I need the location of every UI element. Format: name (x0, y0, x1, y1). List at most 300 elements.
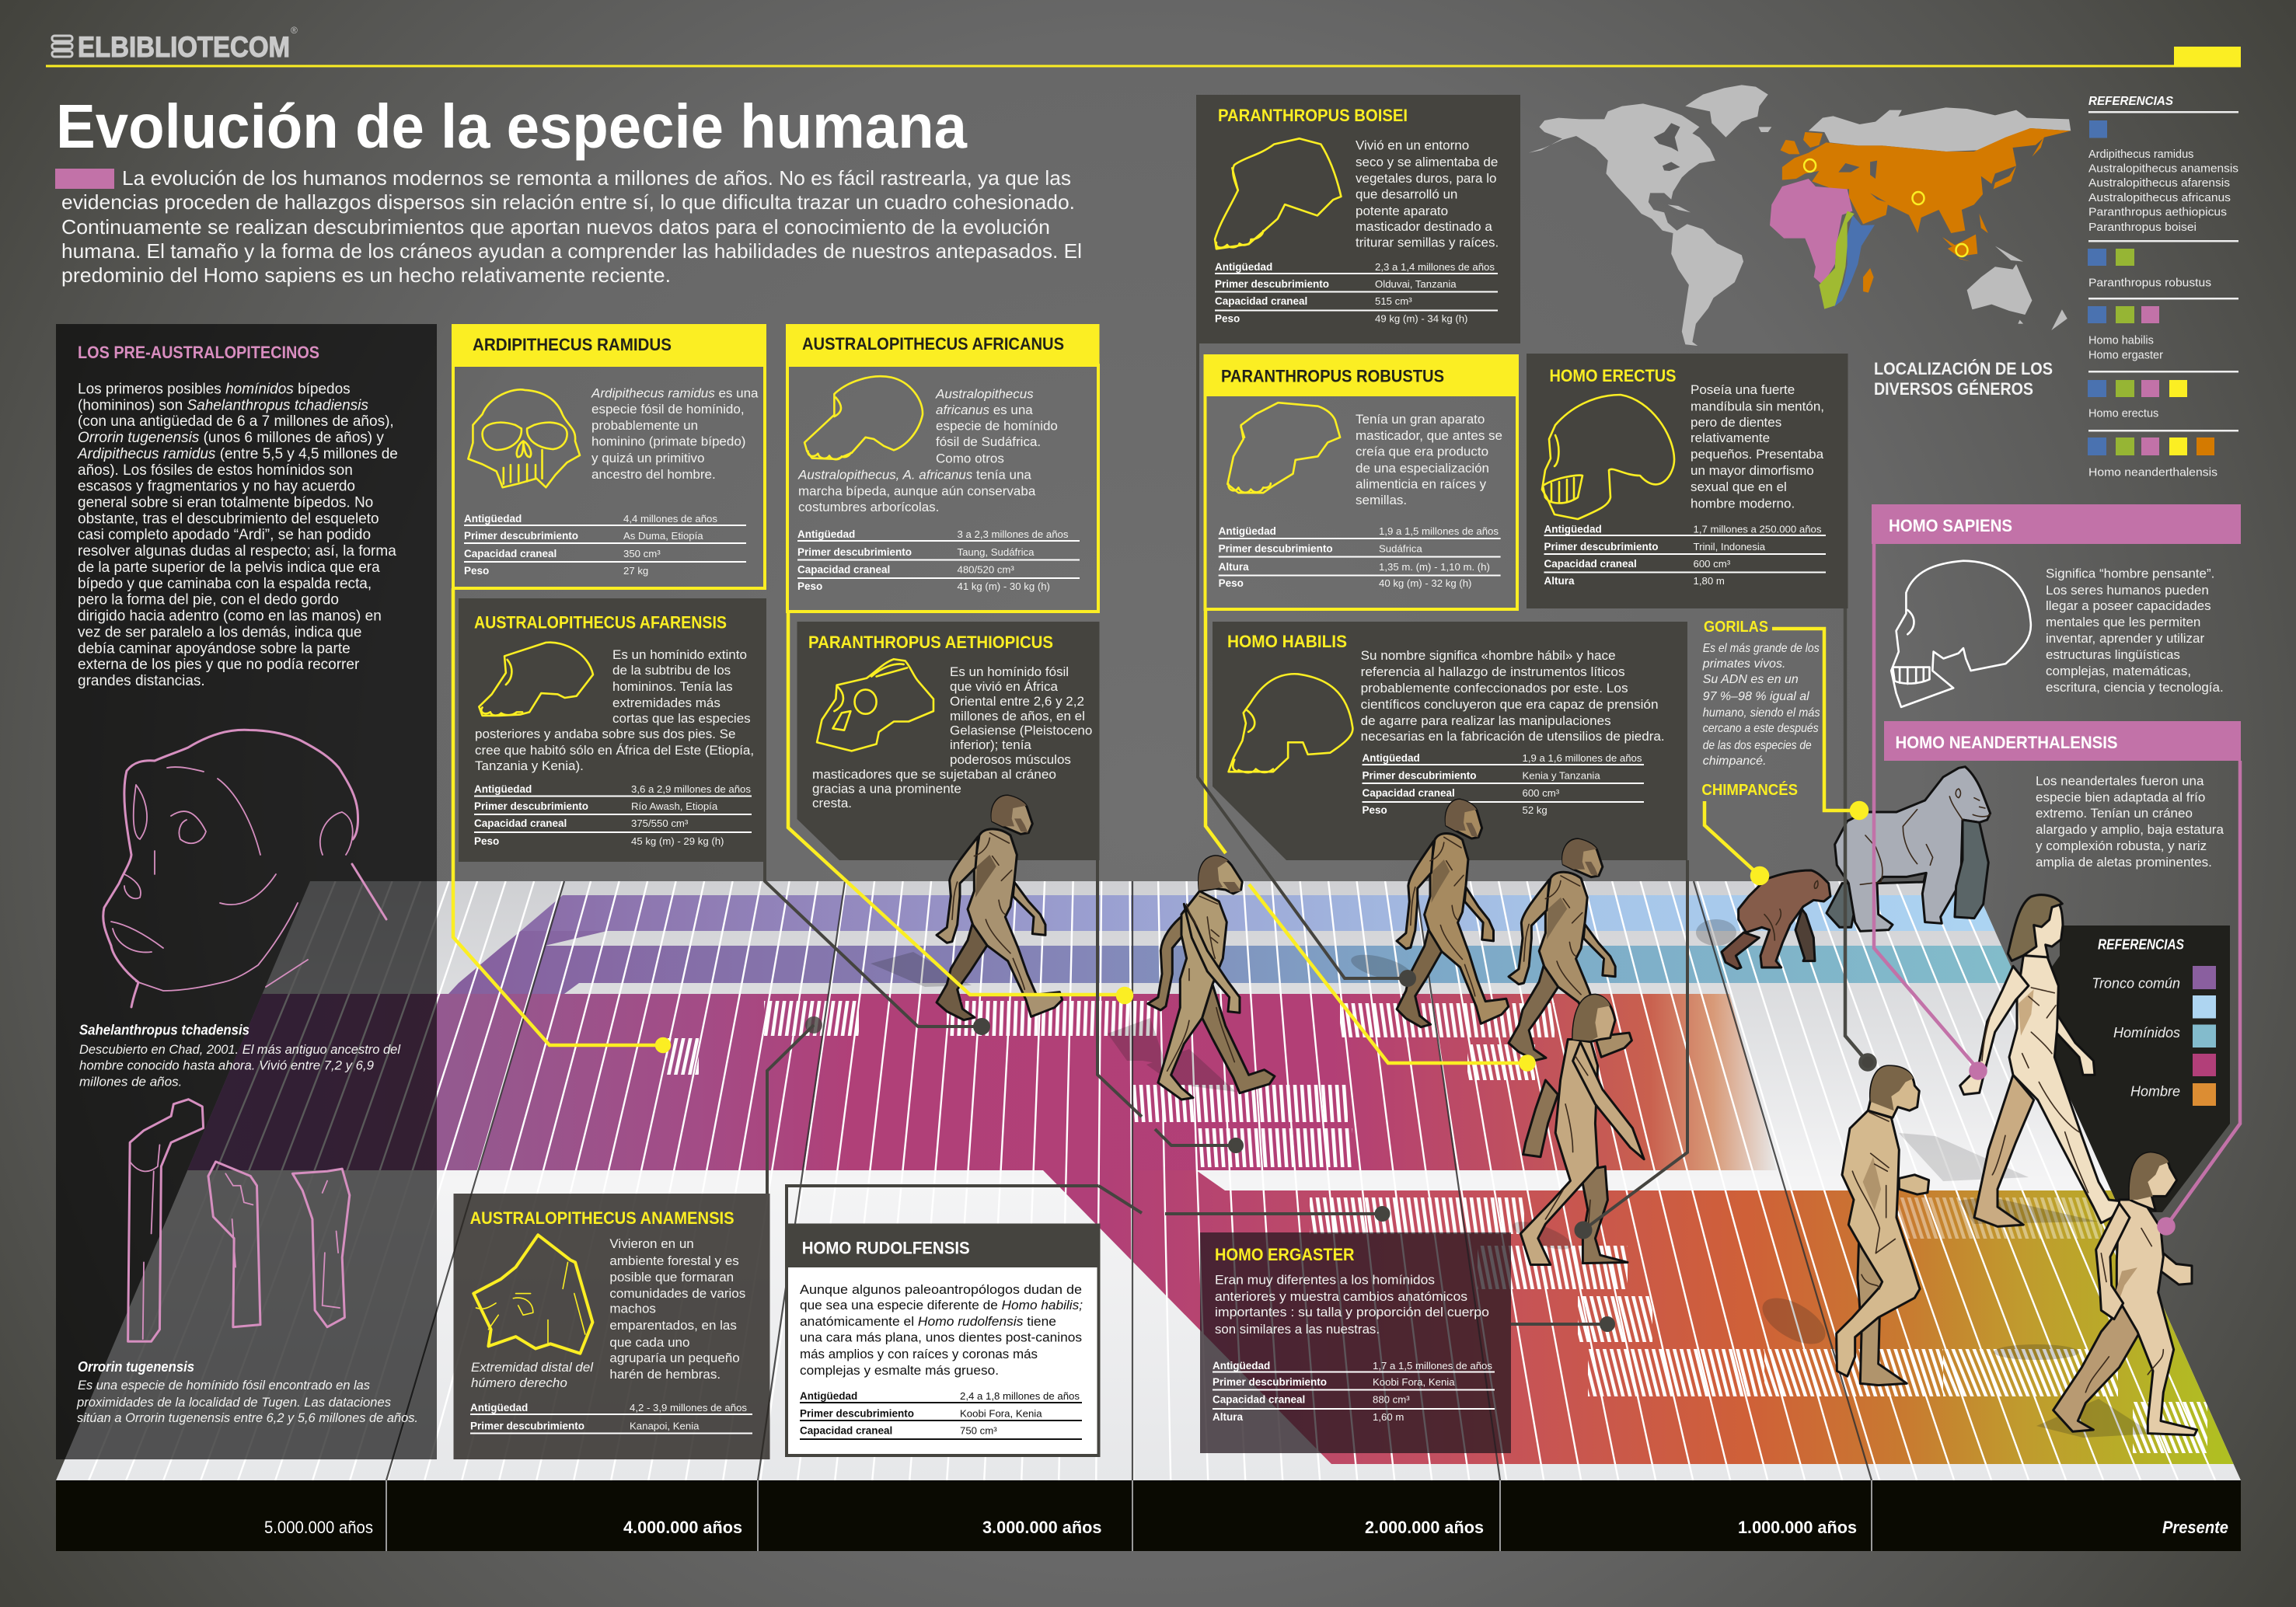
panel: paranthropus boisei: Vivió en un entorno (1356, 138, 1469, 153)
panel: paranthropus robustus: 1,9 a 1,5 millones de años (1379, 525, 1499, 537)
text: pre-australopitecinos description: Ardipithecus ramidus (entre 5,5 y 4,5 millones de (77, 446, 398, 462)
icon: afarensis skull (479, 643, 593, 716)
map legend: Paranthropus robustus (2088, 277, 2211, 290)
panel: homo ergaster (1200, 1232, 1511, 1453)
text: sahelanthropus tchadensis: millones de años. (79, 1074, 182, 1089)
panel: homo erectus: pero de dientes (1691, 415, 1781, 430)
panel: paranthropus robustus: 40 kg (m) - 32 kg (h) (1379, 577, 1471, 589)
panel: homo habilis: HOMO HABILIS (1227, 632, 1347, 651)
panel: paranthropus boisei: 515 cm³ (1375, 295, 1412, 307)
panel: ardipithecus ramidus: 4,4 millones de años (623, 513, 717, 525)
text: orrorin tugenensis: Orrorin tugenensis (78, 1359, 194, 1375)
icon: robustus skull (1227, 403, 1340, 493)
map: localization of genera (1529, 85, 2071, 346)
text: pre-australopitecinos description: (homininos) son Sahelanthropus tchadiensis (78, 397, 368, 413)
panel: paranthropus robustus: creía que era producto (1356, 444, 1488, 459)
panel: australopithecus afarensis: Capacidad craneal (474, 817, 567, 829)
icon: habilis skull (1229, 674, 1352, 772)
panel: australopithecus africanus: costumbres arborícolas. (798, 500, 939, 514)
panel: australopithecus africanus: 3 a 2,3 millones de años (958, 528, 1069, 540)
panel: australopithecus afarensis: 45 kg (m) - 29 kg (h) (631, 835, 724, 847)
panel: homo rudolfensis: más amplios y con raíces y coronas más (800, 1347, 1038, 1361)
text: pre-australopitecinos description: general sobre si eran totalmente bípedos. No (78, 494, 373, 511)
panel: homo erectus (1527, 354, 1848, 608)
time scale bar (56, 1480, 2241, 1551)
text: pre-australopitecinos description: grandes distancias. (78, 673, 205, 689)
panel: homo sapiens: Significa “hombre pensante”. (2046, 566, 2214, 581)
panel: homo erectus: 1,7 millones a 250.000 años (1693, 524, 1822, 535)
text: orrorin tugenensis: proximidades de la localidad de Tugen. Las dataciones (76, 1395, 391, 1410)
panel: australopithecus anamensis: ambiente forestal y es (609, 1253, 739, 1268)
panel: paranthropus boisei: Olduvai, Tanzania (1375, 278, 1457, 290)
panel: homo ergaster: Altura (1213, 1411, 1243, 1423)
header rule with yellow tab (46, 47, 2241, 67)
panel: paranthropus robustus: Altura (1219, 561, 1249, 573)
leader: afarensis (765, 862, 989, 1034)
panel: australopithecus afarensis: 375/550 cm³ (631, 817, 689, 829)
panel: australopithecus africanus: especie de homínido (936, 419, 1058, 434)
figure: homo neanderthalensis walker (2053, 1152, 2197, 1435)
panel: paranthropus robustus: 1,35 m. (m) - 1,10 m. (h) (1379, 561, 1490, 573)
map legend: Homo ergaster (2088, 350, 2163, 362)
panel: ardipithecus ramidus: Peso (464, 565, 489, 577)
panel: homo erectus: un mayor dimorfismo (1691, 463, 1814, 478)
intro text: Continuamente se realizan descubrimientos que aportan nuevos datos para el conocimiento de la evolución (61, 217, 1050, 239)
panel: homo erectus: 1,80 m (1693, 575, 1725, 587)
panel: paranthropus aethiopicus: que vivió en África (950, 679, 1058, 694)
panel: homo rudolfensis: Aunque algunos paleoantropólogos dudan de (800, 1282, 1082, 1297)
illustration: gorilla (1827, 767, 1991, 931)
panel: los pre-australopitecinos: LOS PRE-AUSTRALOPITECINOS (78, 343, 319, 362)
panel: paranthropus aethiopicus: Gelasiense (Pleistoceno (950, 723, 1092, 738)
panel: homo erectus: HOMO ERECTUS (1550, 366, 1676, 385)
leader: chimpancés (1705, 801, 1767, 884)
logo: elbibliotecom: ® (291, 25, 298, 36)
panel: homo habilis: Capacidad craneal (1362, 787, 1455, 799)
panel: paranthropus robustus: de una especialización (1356, 461, 1489, 476)
icon: aethiopicus skull (817, 659, 933, 751)
panel: homo erectus: Poseía una fuerte (1691, 382, 1795, 397)
panel: gorilas and chimpancés: humano, siendo el más (1703, 706, 1820, 720)
panel: paranthropus aethiopicus: poderosos músculos (950, 752, 1071, 767)
panel: australopithecus anamensis: 4,2 - 3,9 millones de años (630, 1402, 747, 1414)
panel: homo neanderthalensis: Los neandertales fueron una (2036, 774, 2204, 789)
title: Evolución de la especie humana (56, 92, 967, 161)
logo: elbibliotecom: ELBIBLIOTECOM (78, 31, 290, 63)
panel: homo sapiens: HOMO SAPIENS (1889, 516, 2012, 535)
panel: australopithecus africanus: Antigüedad (797, 528, 855, 540)
time lines on floor (386, 881, 1872, 1480)
panel: homo ergaster: Antigüedad (1213, 1360, 1270, 1372)
panel: homo neanderthalensis: especie bien adaptada al frío (2036, 790, 2205, 805)
panel: australopithecus anamensis: Antigüedad (470, 1402, 528, 1414)
figure: hominid walker habilis (1397, 800, 1509, 1027)
panel: homo neanderthalensis: y complexión robusta, y nariz (2036, 838, 2207, 853)
panel: homo habilis: científicos concluyeron que era capaz de prensión (1361, 697, 1659, 712)
panel: australopithecus afarensis: de la subtribu de los (612, 663, 731, 678)
panel: homo sapiens: complejas, matemáticas, (2046, 664, 2191, 678)
panel: homo habilis (1213, 622, 1687, 860)
panel: homo ergaster: HOMO ERGASTER (1215, 1245, 1355, 1264)
map legend: Homo neanderthalensis (2088, 467, 2217, 479)
panel: timeline references (2021, 926, 2230, 1212)
intro text: evidencias proceden de hallazgos dispersos sin relación entre sí, lo que dificulta trazar un cuadro cohesionado. (61, 192, 1075, 214)
panel: australopithecus anamensis: comunidades de varios (609, 1286, 745, 1301)
panel: ardipithecus ramidus: 27 kg (623, 565, 648, 577)
panel: paranthropus aethiopicus: gracias a una prominente (812, 782, 961, 796)
timeline floor (56, 881, 2241, 1480)
panel: ardipithecus ramidus: hominino (primate bípedo) (591, 434, 745, 449)
panel: australopithecus anamensis (454, 1194, 769, 1459)
map legend: REFERENCIAS (2088, 95, 2173, 108)
intro text (55, 168, 1082, 287)
text: pre-australopitecinos description: Los primeros posibles homínidos bípedos (78, 381, 351, 398)
panel: homo rudolfensis: 2,4 a 1,8 millones de años (960, 1390, 1080, 1402)
panel: paranthropus robustus: semillas. (1356, 493, 1407, 507)
panel: australopithecus afarensis: Antigüedad (474, 783, 532, 795)
text: orrorin tugenensis (76, 1359, 418, 1425)
panel: homo neanderthalensis: extremo. Tenían un cráneo (2036, 806, 2193, 821)
icon: erectus skull (1542, 395, 1674, 519)
panel: homo habilis: referencia al hallazgo de instrumentos líticos (1361, 664, 1625, 679)
leader: homo erectus (1845, 608, 1875, 1069)
panel: australopithecus anamensis: emparentados, en las (609, 1318, 737, 1333)
panel: australopithecus africanus: Taung, Sudáfrica (958, 546, 1035, 558)
panel: gorilas and chimpancés: 97 %–98 % igual al (1703, 690, 1809, 703)
text: pre-australopitecinos description: Orrorin tugenensis (unos 6 millones de años) y (78, 430, 384, 446)
panel: australopithecus africanus: Peso (797, 580, 822, 592)
panel: paranthropus robustus: PARANTHROPUS ROBUSTUS (1221, 367, 1444, 385)
panel: paranthropus robustus: Peso (1219, 577, 1244, 589)
leader: africanus yellow (788, 612, 1132, 1002)
panel: paranthropus robustus: Sudáfrica (1379, 543, 1422, 555)
icon: ardipithecus skull (468, 389, 580, 487)
panel: homo erectus: Capacidad craneal (1544, 558, 1637, 570)
panel: paranthropus boisei: 49 kg (m) - 34 kg (h) (1375, 313, 1467, 325)
text: sahelanthropus tchadensis: hombre conocido hasta ahora. Vivió entre 7,2 y 6,9 (79, 1058, 375, 1072)
panel: paranthropus robustus: masticador, que antes se (1356, 428, 1502, 443)
panel: gorilas and chimpancés (1701, 619, 1820, 799)
panel: homo rudolfensis: 750 cm³ (960, 1425, 997, 1437)
text: pre-australopitecinos description (77, 381, 398, 689)
icon: sapiens skull (1891, 561, 2031, 707)
panel: australopithecus africanus: fósil de Sudáfrica. (936, 434, 1041, 449)
map title (1874, 359, 2053, 399)
leader: aethiopicus (1097, 860, 1242, 1152)
panel: paranthropus robustus (1203, 354, 1519, 609)
panel: homo rudolfensis: Primer descubrimiento (800, 1408, 914, 1419)
panel: timeline references: Tronco común (2092, 976, 2180, 992)
panel: homo erectus: Altura (1544, 575, 1575, 587)
panel: homo erectus: hombre moderno. (1691, 496, 1795, 511)
panel: paranthropus aethiopicus: masticadores que se sujetaban al cráneo (812, 767, 1056, 782)
panel: homo rudolfensis (787, 1186, 1099, 1455)
panel: homo sapiens: mentales que les permiten (2046, 615, 2200, 629)
panel: australopithecus afarensis: Primer descubrimiento (474, 800, 588, 812)
figure: hominid walker robustus (1509, 839, 1631, 1061)
map legend (2088, 95, 2238, 479)
text: pre-australopitecinos description: obstante, tras el descubrimiento del esqueleto (78, 511, 379, 527)
panel: homo habilis: Primer descubrimiento (1362, 770, 1477, 782)
panel: australopithecus africanus: Como otros (936, 451, 1004, 466)
panel: ardipithecus ramidus: Ardipithecus ramidus es una (591, 386, 759, 401)
time scale bar: 4.000.000 años (623, 1518, 742, 1537)
panel: australopithecus afarensis: cree que habitó sólo en África del Este (Etiopía, (475, 743, 754, 758)
panel: ardipithecus ramidus: 350 cm³ (623, 548, 661, 559)
panel: paranthropus boisei: seco y se alimentaba de (1356, 155, 1498, 169)
panel: ardipithecus ramidus: y quizá un primitivo (591, 451, 705, 465)
panel: australopithecus afarensis (459, 598, 766, 862)
panel: homo erectus: mandíbula sin mentón, (1691, 399, 1824, 414)
panel: ardipithecus ramidus: Antigüedad (464, 513, 522, 525)
panel: australopithecus anamensis: húmero derecho (471, 1375, 567, 1390)
text: pre-australopitecinos description: (con una antigüedad de 6 a 7 millones de años), (78, 413, 394, 430)
panel: ardipithecus ramidus: Capacidad craneal (464, 548, 557, 559)
illustration: sahelanthropus head (103, 730, 386, 1007)
panel: australopithecus anamensis: Primer descubrimiento (470, 1421, 584, 1431)
text: pre-australopitecinos description: de la parte superior de la pelvis indica que era (78, 559, 380, 576)
figure: homo ergaster walker (1520, 995, 1644, 1265)
panel: homo habilis: Antigüedad (1362, 752, 1420, 764)
panel: homo ergaster: importantes : su talla y proporción del cuerpo (1215, 1305, 1489, 1319)
panel: australopithecus africanus: Primer descubrimiento (797, 546, 912, 558)
panel: ardipithecus ramidus: especie fósil de homínido, (591, 402, 745, 417)
panel: homo habilis: Peso (1362, 804, 1387, 816)
panel: gorilas and chimpancés: primates vivos. (1702, 657, 1785, 671)
panel: gorilas and chimpancés: chimpancé. (1703, 755, 1767, 768)
panel: ardipithecus ramidus: ancestro del hombre. (591, 467, 716, 482)
illustration: chimpanzee (1722, 870, 1830, 969)
panel: homo erectus: Antigüedad (1544, 524, 1602, 535)
icon: africanus skull (804, 376, 923, 459)
panel: australopithecus anamensis: que cada uno (609, 1335, 689, 1350)
panel: homo ergaster: 880 cm³ (1373, 1394, 1410, 1405)
panel: ardipithecus ramidus: probablemente un (591, 418, 698, 433)
panel: australopithecus africanus: AUSTRALOPITHECUS AFRICANUS (802, 334, 1064, 354)
map legend: Homo erectus (2088, 408, 2158, 420)
panel: ardipithecus ramidus: ARDIPITHECUS RAMIDUS (473, 335, 672, 354)
panel: homo sapiens (1872, 504, 2241, 707)
panel: paranthropus robustus: alimenticia en raíces y (1356, 477, 1487, 492)
panel: homo habilis: probablemente confeccionados por este. Los (1361, 681, 1628, 695)
text: pre-australopitecinos description: resolver algunas dudas al respecto; así, la forma (78, 543, 396, 559)
panel: homo habilis: 600 cm³ (1522, 787, 1560, 799)
text: sahelanthropus tchadensis: Sahelanthropus tchadensis (79, 1023, 249, 1038)
panel: gorilas and chimpancés: Es el más grande de los (1703, 642, 1820, 655)
panel: ardipithecus ramidus: As Duma, Etiopía (623, 530, 703, 542)
panel: gorilas and chimpancés: de las dos especies de (1703, 739, 1812, 752)
figure: hominid walker foreground (1148, 856, 1275, 1100)
time scale bar: 2.000.000 años (1365, 1518, 1484, 1537)
leader: anamensis (767, 1018, 821, 1194)
panel: australopithecus africanus: 41 kg (m) - 30 kg (h) (958, 580, 1050, 592)
panel: los pre-australopitecinos (56, 324, 437, 1459)
panel: homo neanderthalensis (1884, 721, 2241, 870)
figure: homo sapiens walker (1960, 895, 2124, 1226)
panel: homo sapiens: inventar, aprender y utilizar (2046, 631, 2204, 646)
intro text: predominio del Homo sapiens es un hecho relativamente reciente. (61, 265, 671, 287)
panel: homo erectus: sexual que en el (1691, 479, 1787, 494)
panel: homo ergaster: Capacidad craneal (1213, 1394, 1305, 1405)
panel: homo ergaster: son similares a las nuestras. (1215, 1322, 1380, 1337)
panel: paranthropus boisei: 2,3 a 1,4 millones de años (1375, 261, 1495, 273)
panel: paranthropus robustus: Tenía un gran aparato (1356, 412, 1485, 427)
text: pre-australopitecinos description: vez de ser paralelo a los demás, indica que (78, 624, 361, 640)
panel: gorilas and chimpancés: CHIMPANCÉS (1701, 781, 1798, 799)
panel: paranthropus aethiopicus: Es un homínido fósil (950, 664, 1069, 679)
panel: homo rudolfensis: que sea una especie diferente de Homo habilis; (800, 1298, 1083, 1312)
panel: homo ergaster: Eran muy diferentes a los homínidos (1215, 1273, 1435, 1287)
map legend: Paranthropus aethiopicus (2088, 207, 2227, 219)
panel: australopithecus anamensis: AUSTRALOPITHECUS ANAMENSIS (470, 1208, 735, 1228)
leader: homo habilis (1576, 860, 1687, 1237)
time scale bar: 3.000.000 años (982, 1518, 1102, 1537)
panel: gorilas and chimpancés: GORILAS (1704, 619, 1768, 636)
time scale bar: 1.000.000 años (1738, 1518, 1857, 1537)
panel: homo sapiens: Los seres humanos pueden (2046, 583, 2209, 598)
panel: australopithecus afarensis: cortas que las especies (612, 711, 751, 726)
panel: homo sapiens: escritura, ciencia y tecnología. (2046, 680, 2224, 695)
panel: australopithecus afarensis: posteriores y andaba sobre sus dos pies. Se (475, 727, 735, 741)
panel: homo rudolfensis: una cara más plana, unos dientes post-caninos (800, 1330, 1082, 1344)
figure: hominid walker aethiopicus (937, 796, 1063, 1020)
panel: australopithecus afarensis: Peso (474, 835, 499, 847)
leader: boisei (1198, 343, 1415, 985)
panel: australopithecus africanus: marcha bípeda, aunque aún conservaba (798, 483, 1036, 499)
panel: australopithecus afarensis: homininos. Tenía las (612, 679, 733, 694)
panel: australopithecus africanus: 480/520 cm³ (958, 564, 1014, 575)
icon: boisei skull (1215, 138, 1341, 249)
panel: homo habilis: necesarias en la fabricación de utensilios de piedra. (1361, 729, 1665, 744)
panel: homo habilis: 52 kg (1522, 804, 1548, 816)
map legend: Australopithecus anamensis (2088, 163, 2238, 176)
illustration: orrorin femur fossils (128, 1100, 350, 1341)
panel: gorilas and chimpancés: cercano a este después (1703, 722, 1819, 735)
map legend: Australopithecus africanus (2088, 192, 2231, 204)
panel: australopithecus afarensis: Río Awash, Etiopía (631, 800, 718, 812)
panel: australopithecus afarensis: 3,6 a 2,9 millones de años (631, 783, 751, 795)
panel: paranthropus robustus: Antigüedad (1219, 525, 1276, 537)
panel: paranthropus boisei: Peso (1215, 313, 1240, 325)
leader: rudolfensis (1099, 1186, 1388, 1220)
panel: paranthropus boisei: Primer descubrimiento (1215, 278, 1329, 290)
panel: paranthropus boisei (1196, 95, 1520, 343)
panel: homo ergaster: anteriores y muestra cambios anatómicos (1215, 1289, 1467, 1304)
map legend: Homo habilis (2088, 334, 2154, 347)
map markers (1804, 159, 1968, 256)
panel: homo rudolfensis: complejas y esmalte más grueso. (800, 1363, 999, 1378)
panel: homo sapiens: llegar a poseer capacidades (2046, 598, 2211, 613)
figure: homo erectus walker (1837, 1066, 1929, 1386)
panel: homo sapiens: estructuras lingüísticas (2046, 647, 2180, 662)
panel: paranthropus aethiopicus: cresta. (812, 796, 852, 810)
panel: australopithecus anamensis: agruparía un pequeño (609, 1351, 740, 1365)
panel: timeline references: Homínidos (2113, 1025, 2180, 1041)
panel: paranthropus boisei: Capacidad craneal (1215, 295, 1307, 307)
panel: australopithecus anamensis: Extremidad distal del (471, 1360, 594, 1375)
panel: homo rudolfensis: anatómicamente el Homo rudolfensis tiene (800, 1314, 1056, 1329)
panel: australopithecus anamensis: Vivieron en un (609, 1236, 694, 1251)
panel: paranthropus aethiopicus: millones de años, en el (950, 709, 1085, 723)
leader: homo ergaster (1511, 1318, 1614, 1330)
panel: homo erectus: relativamente (1691, 431, 1770, 445)
panel: australopithecus anamensis: harén de hembras. (609, 1367, 721, 1382)
panel: homo neanderthalensis: alargado y amplio, baja estatura (2036, 822, 2224, 837)
panel: australopithecus anamensis: Kanapoi, Kenia (630, 1421, 700, 1431)
panel: paranthropus aethiopicus: Oriental entre 2,6 y 2,2 (950, 694, 1084, 709)
text: orrorin tugenensis: sitúan a Orrorin tugenensis entre 6,2 y 5,6 millones de años. (77, 1410, 418, 1425)
panel: australopithecus afarensis: AUSTRALOPITHECUS AFARENSIS (474, 613, 727, 633)
panel: homo rudolfensis: Koobi Fora, Kenia (960, 1408, 1042, 1419)
panel: paranthropus boisei: vegetales duros, para lo (1356, 171, 1496, 186)
panel: paranthropus boisei: masticador destinado a (1356, 219, 1492, 234)
panel: homo rudolfensis: HOMO RUDOLFENSIS (802, 1239, 970, 1258)
map title: LOCALIZACIÓN DE LOS (1874, 359, 2053, 378)
panel: homo ergaster: Koobi Fora, Kenia (1373, 1376, 1455, 1388)
intro text: humana. El tamaño y la forma de los cráneos ayudan a comprender las habilidades de nuestros antepasados. El (61, 241, 1082, 263)
panel: australopithecus anamensis: posible que formaran (609, 1270, 734, 1285)
panel: homo erectus: pequeños. Presentaba (1691, 447, 1824, 462)
text: pre-australopitecinos description: casi completo apodado “Ardi”, se han podido (78, 527, 371, 543)
panel: ardipithecus ramidus: Primer descubrimiento (464, 530, 578, 542)
panel: australopithecus afarensis: Es un homínido extinto (612, 647, 747, 662)
panel: australopithecus africanus: Australopithecus (935, 387, 1034, 401)
leader: robustus yellow (1206, 609, 1534, 1069)
text: orrorin tugenensis: Es una especie de homínido fósil encontrado en las (78, 1378, 370, 1393)
time scale bar: Presente (2162, 1518, 2228, 1537)
panel: australopithecus afarensis: extremidades más (612, 695, 721, 710)
panel: paranthropus boisei: Antigüedad (1215, 261, 1272, 273)
map legend: Ardipithecus ramidus (2088, 148, 2193, 161)
text: pre-australopitecinos description: externa de los pies y que no podía recorrer (78, 657, 360, 673)
leader: homo sapiens (1874, 544, 1985, 1079)
time scale bar: 5.000.000 años (264, 1518, 373, 1537)
map title: DIVERSOS GÉNEROS (1874, 379, 2033, 399)
panel: homo habilis: Kenia y Tanzania (1522, 770, 1600, 782)
intro text: La evolución de los humanos modernos se remonta a millones de años. No es fácil rastrearla, ya que las (122, 168, 1071, 190)
panel: paranthropus boisei: que desarrolló un (1356, 186, 1457, 202)
text: pre-australopitecinos description: escasos y fragmentarios y no hay acuerdo (78, 479, 355, 495)
text: pre-australopitecinos description: pero la forma del pie, con el dedo gordo (78, 592, 339, 608)
panel: australopithecus africanus: Australopithecus, A. africanus tenía una (797, 468, 1031, 482)
panel: homo rudolfensis: Capacidad craneal (800, 1425, 892, 1437)
panel: australopithecus africanus (786, 324, 1099, 612)
panel: ardipithecus ramidus (452, 324, 766, 588)
panel: paranthropus aethiopicus: inferior); tenía (950, 737, 1031, 752)
map legend: Paranthropus boisei (2088, 221, 2197, 234)
panel: timeline references: REFERENCIAS (2098, 937, 2184, 953)
panel: paranthropus boisei: PARANTHROPUS BOISEI (1218, 106, 1408, 125)
panel: australopithecus africanus: africanus es una (936, 403, 1033, 417)
leader: gorilas (1772, 629, 1867, 818)
panel: paranthropus boisei: potente aparato (1356, 204, 1448, 218)
leader: ardipithecus yellow (453, 588, 669, 1051)
panel: homo erectus: 600 cm³ (1693, 558, 1731, 570)
text: pre-australopitecinos description: debía caminar apoyándose sobre la parte (78, 640, 351, 657)
panel: homo habilis: de agarre para realizar las manipulaciones (1361, 713, 1611, 728)
figure shadows (871, 919, 2153, 1438)
panel: australopithecus anamensis: machos (609, 1301, 656, 1316)
panel: paranthropus aethiopicus (797, 622, 1099, 860)
panel: australopithecus afarensis: Tanzania y Kenia). (475, 758, 584, 773)
panel: homo ergaster: 1,7 a 1,5 millones de años (1373, 1360, 1492, 1372)
panel: gorilas and chimpancés: Su ADN es en un (1703, 673, 1799, 686)
panel: paranthropus boisei: triturar semillas y raíces. (1356, 235, 1499, 250)
leader: homo neanderthalensis (2159, 761, 2240, 1234)
text: sahelanthropus tchadensis: Descubierto en Chad, 2001. El más antiguo ancestro del (79, 1042, 401, 1057)
panel: homo neanderthalensis: amplia de aletas prominentes. (2036, 855, 2212, 870)
text: pre-australopitecinos description: años). Los fósiles de estos homínidos son (78, 462, 353, 479)
